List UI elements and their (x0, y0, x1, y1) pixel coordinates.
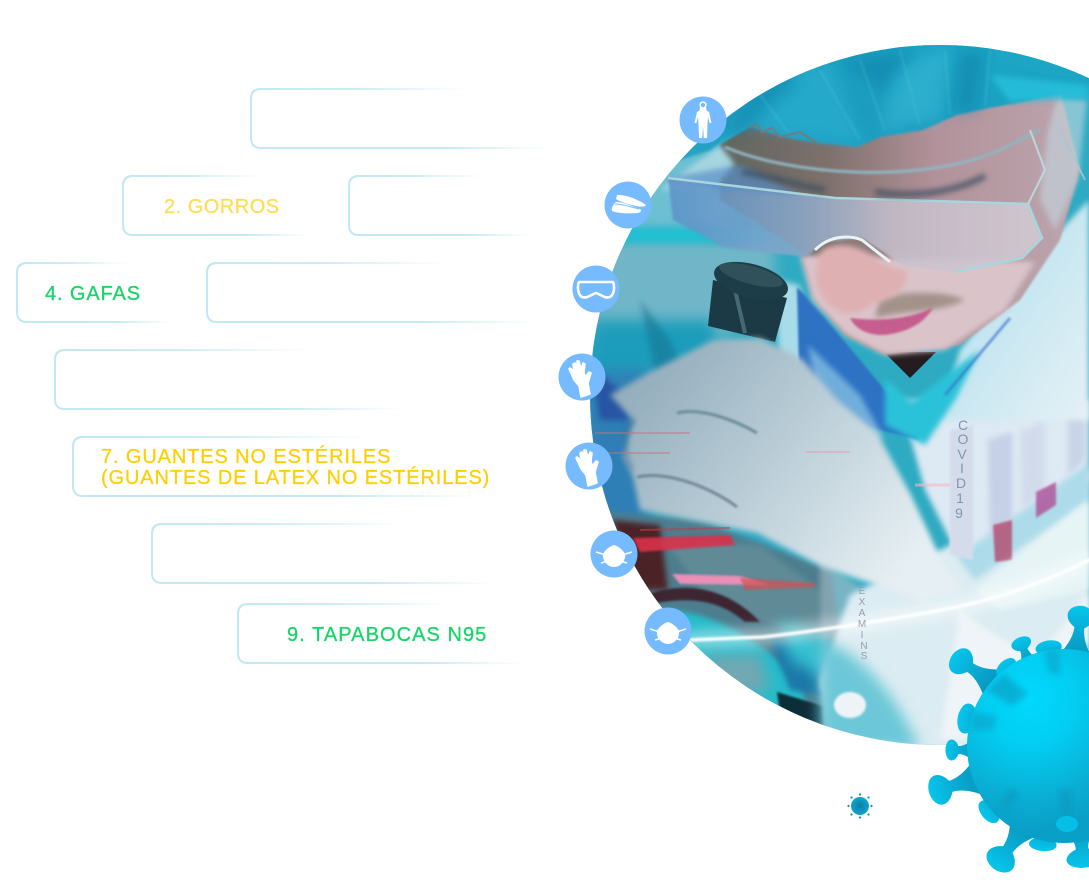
gloved hand (610, 338, 963, 600)
label box 9: tapabocas N95 (238, 604, 545, 663)
label box 5 (207, 263, 560, 322)
test tube label: COVID19: 9 (955, 505, 963, 521)
coat shoulder right (940, 200, 1089, 420)
label box 7: guantes no estériles: 7. GUANTES NO ESTÉRILES (101, 445, 391, 468)
label box 4: gafas: 4. GAFAS (45, 283, 141, 305)
label box 3 (349, 176, 545, 235)
photo base (585, 40, 1089, 750)
left background tones (585, 150, 775, 540)
white flare arc (690, 560, 1089, 640)
test tube label: COVID19: V (957, 446, 967, 462)
lower right: coat and sleeve (820, 470, 1089, 760)
label box 1: 1. BATA MANGA LARGA (299, 97, 532, 118)
label box 3: 3. POLAINAS (383, 197, 512, 218)
test tube label: COVID19: I (960, 460, 964, 476)
surgical hair cap (680, 45, 1089, 161)
stubble (875, 293, 965, 318)
icon: goggles (572, 266, 620, 312)
test tube label: COVID19: D (956, 475, 966, 491)
label box 8: (MASCARILLA DE TELA) (193, 555, 433, 576)
label box 8 (152, 524, 520, 583)
label box 7: guantes no estériles (73, 437, 510, 496)
test tube label: EXAMINS: M (858, 619, 866, 630)
label box 2: gorros: 2. GORROS (164, 196, 280, 218)
motion streaks (595, 433, 950, 530)
test tube label: COVID19: O (958, 431, 969, 447)
coat collar (797, 287, 1010, 445)
label box 6 (55, 350, 434, 409)
icon: non-sterile glove (566, 442, 612, 490)
lower microscope area (610, 510, 864, 735)
test tube label: COVID19: C (958, 417, 968, 433)
test tube label: EXAMINS: A (859, 608, 866, 619)
test tube label: EXAMINS: S (861, 651, 868, 662)
test tube label: COVID19: 1 (956, 490, 964, 506)
label box 7: guantes no estériles: (GUANTES DE LATEX NO ESTÉRILES) (101, 466, 490, 489)
label box 9: tapabocas N95: 9. TAPABOCAS N95 (287, 624, 487, 646)
icon: sterile glove (558, 354, 606, 400)
test tube label: EXAMINS: X (859, 597, 866, 608)
test tube label: COVID19 (956, 420, 968, 518)
label box 2: gorros (123, 176, 325, 235)
label box 8: 8. TAPABOCAS (193, 534, 342, 555)
microscope eyepiece (708, 262, 788, 342)
lower face highlight (800, 255, 1035, 355)
icon: N95 mask (644, 608, 692, 654)
label box 6: (GUANTES DE LATEX ESTÉRILES) (90, 381, 434, 402)
test tube label: EXAMINS: E (859, 586, 866, 597)
label box 5: 5. PROTECTOR FACIAL (245, 284, 479, 305)
protective goggles (660, 97, 1087, 272)
label box 6: 6. GUANTES ESTÉRILES (90, 360, 337, 381)
pale coat left of face (774, 278, 805, 362)
small coronavirus particle (847, 793, 873, 819)
label box 1 (251, 89, 593, 148)
photo: scientist with microscope in circular crop (585, 40, 1089, 760)
large coronavirus particle (923, 604, 1089, 881)
icon: cloth mask (590, 530, 638, 578)
label box 1: ANTIFLUIDO O DESECHABLE (299, 118, 593, 139)
lips (850, 307, 933, 335)
test tube label: EXAMINS (858, 587, 867, 659)
icon: protective suit (680, 96, 726, 144)
face (720, 90, 1080, 355)
label box 4: gafas (17, 263, 180, 322)
icon: shoe covers (604, 182, 652, 228)
nose (816, 245, 908, 313)
centre right: lab coat with test tubes (900, 400, 1089, 610)
test tube label: EXAMINS: I (861, 630, 863, 641)
neck shadow (884, 352, 936, 378)
eye lashes (742, 172, 985, 194)
test tube label: EXAMINS: N (860, 641, 868, 652)
